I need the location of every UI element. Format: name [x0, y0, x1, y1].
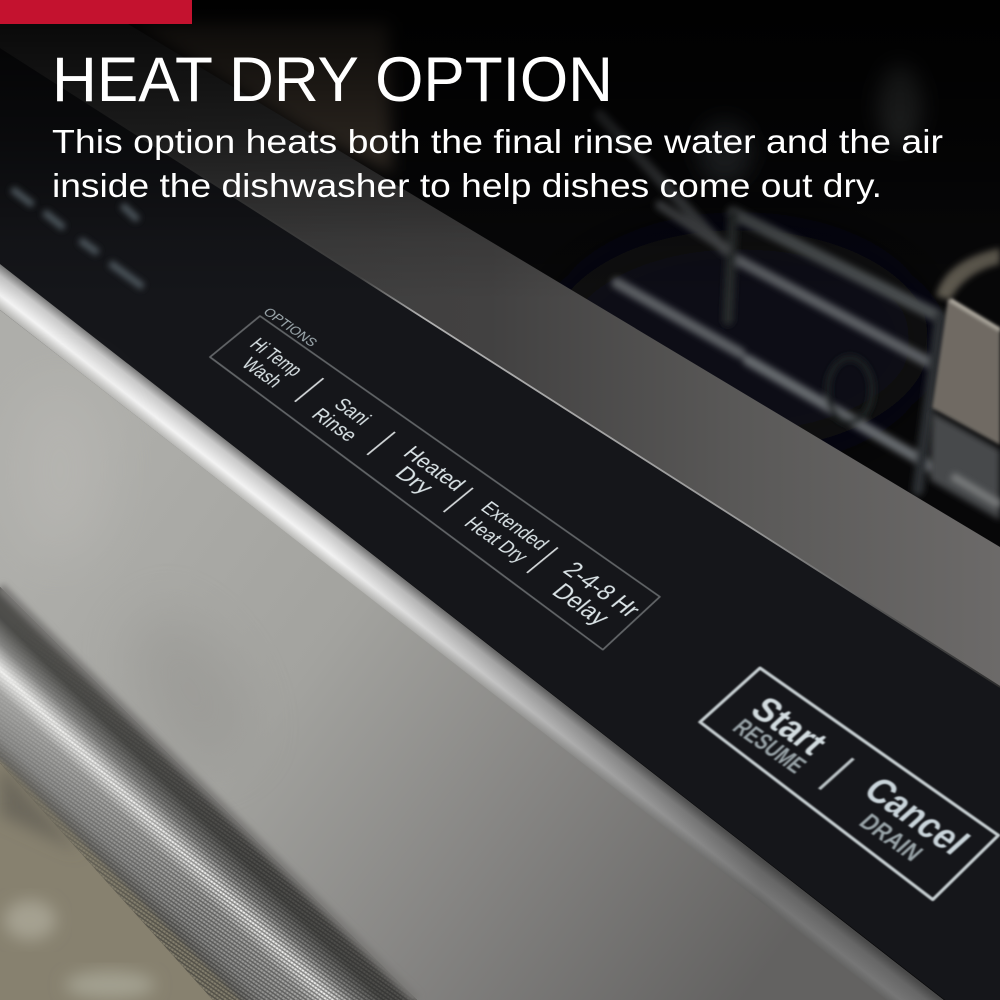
description: [52, 123, 943, 204]
button: delay: Delay: [546, 579, 615, 630]
door front: brushed steel: [0, 310, 887, 1000]
divider: [444, 488, 473, 512]
start and cancel button: [691, 668, 1000, 900]
blurred out-of-focus panel labels: [12, 189, 143, 287]
title: HEAT DRY OPTION: [52, 45, 613, 115]
button: hi temp wash: [228, 335, 307, 394]
divider: [367, 432, 395, 455]
button: heated dry: [381, 442, 471, 509]
description: inside the dishwasher to help dishes come out dry.: [52, 167, 882, 204]
description: This option heats both the final rinse water and the air: [52, 123, 943, 160]
button: sani rinse: [307, 391, 379, 446]
dish rack wires: [600, 115, 940, 490]
divider: [819, 758, 853, 789]
stainless cup in rack: [930, 248, 1000, 520]
trim: bright chrome band: [0, 264, 945, 1000]
steel top strip of the door: [0, 0, 1000, 690]
button: hi temp wash: Wash: [237, 355, 286, 391]
drain label: DRAIN: [853, 810, 928, 866]
options button group: [198, 305, 676, 650]
button outline: [691, 668, 1000, 900]
warm blur behind the top edge of the door: [130, 22, 392, 172]
button: extended heat dry: Extended: [476, 498, 552, 554]
divider: [295, 378, 323, 402]
button: extended heat dry: [458, 498, 552, 569]
button: heated dry: Heated: [398, 442, 471, 495]
button: heated dry: Dry: [390, 462, 439, 498]
door handle with textured finish: [0, 587, 417, 1000]
button: delay: 2-4-8 Hr: [557, 558, 646, 622]
dim interior shapes: [550, 230, 930, 450]
cancel label: Cancel: [855, 770, 977, 862]
button: sani rinse: Rinse: [307, 405, 362, 446]
red accent bar: [0, 0, 192, 24]
top darkening overlay: [0, 0, 1000, 300]
divider: [527, 548, 558, 573]
button: hi temp wash: Hi Temp: [245, 335, 307, 380]
options outline box: [199, 316, 664, 650]
button: delay: [538, 558, 646, 638]
floor seen below the door: [0, 763, 213, 1000]
start label: Start: [742, 690, 836, 762]
button: extended heat dry: Heat Dry: [459, 514, 532, 567]
options heading: OPTIONS: [260, 305, 321, 349]
panel top highlight line: [0, 47, 1000, 687]
button: sani rinse: Sani: [329, 395, 375, 429]
resume label: RESUME: [727, 715, 811, 778]
